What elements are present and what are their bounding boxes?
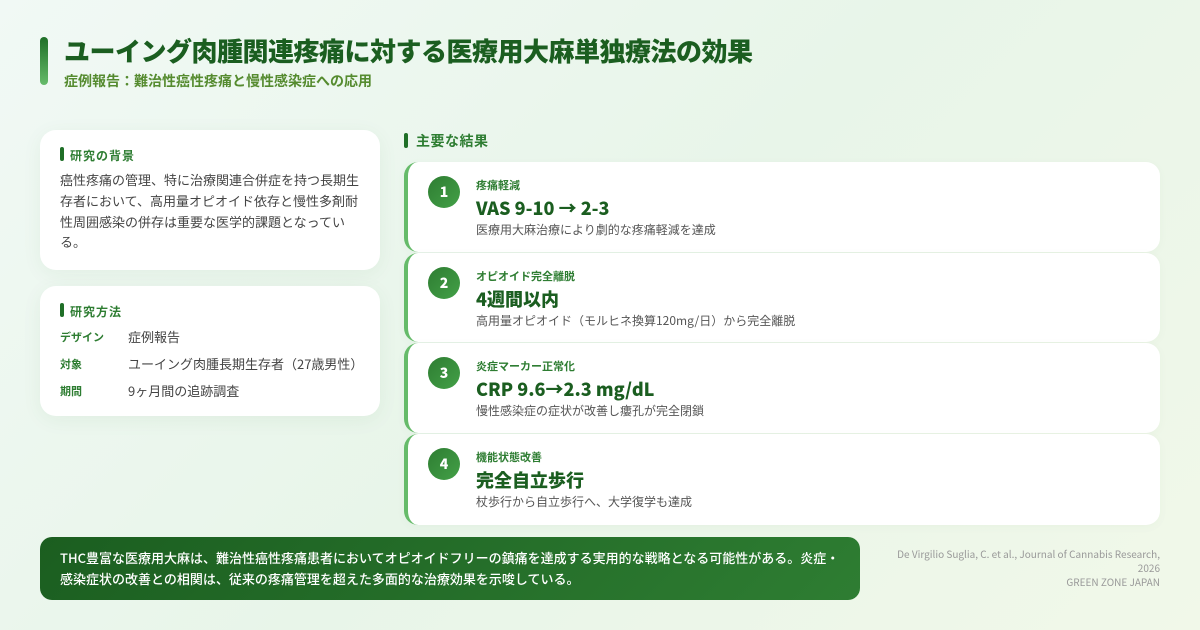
description: 杖歩行から自立歩行へ、大学復学も達成 (476, 493, 692, 510)
result card 4: functional status (404, 434, 1160, 525)
title accent bar (40, 37, 48, 85)
citation and credit: GREEN ZONE JAPAN (1066, 574, 1160, 589)
label: period: 期間 (60, 383, 82, 399)
label: 機能状態改善 (476, 449, 542, 465)
label: design: デザイン (60, 329, 104, 345)
value: 4週間以内 (476, 286, 559, 312)
conclusion banner (40, 537, 860, 600)
number badge 2 (428, 267, 460, 299)
number badge 1: 1 (440, 182, 448, 202)
conclusion banner: THC豊富な医療用大麻は、難治性癌性疼痛患者においてオピオイドフリーの鎮痛を達成する実用的な戦略となる可能性がある。炎症・感染症状の改善との相関は、従来の疼痛管理を超えた多面的な治療効果を示唆している。 (60, 548, 839, 588)
result card 3: inflammation marker (404, 343, 1160, 433)
number badge 2: 2 (440, 273, 448, 293)
label: subject: 対象 (60, 356, 82, 372)
number badge 3: 3 (440, 363, 448, 383)
value: period: 9ヶ月間の追跡調査 (128, 381, 239, 400)
panel: research methods (40, 286, 380, 416)
background text: 癌性疼痛の管理、特に治療関連合併症を持つ長期生存者において、高用量オピオイド依存と慢性多剤耐性周囲感染の併存は重要な医学的課題となっている。 (60, 170, 359, 251)
number badge 4: 4 (440, 454, 448, 474)
heading: research background: 研究の背景 (70, 147, 135, 164)
result card 2: opioid cessation (404, 253, 1160, 342)
value: 完全自立歩行 (476, 467, 584, 493)
description: 医療用大麻治療により劇的な疼痛軽減を達成 (476, 221, 716, 238)
number badge 4 (428, 448, 460, 480)
label: オピオイド完全離脱 (476, 268, 575, 284)
value: subject: ユーイング肉腫長期生存者（27歳男性） (128, 354, 363, 373)
heading: key results: 主要な結果 (416, 131, 488, 151)
number badge 1 (428, 176, 460, 208)
subtitle: 症例報告：難治性癌性疼痛と慢性感染症への応用 (64, 71, 372, 91)
number badge 3 (428, 357, 460, 389)
value: design: 症例報告 (128, 327, 180, 346)
label: 炎症マーカー正常化 (476, 358, 575, 374)
result card 1: pain relief (404, 162, 1160, 252)
heading: research methods: 研究方法 (70, 303, 122, 320)
panel: research background (40, 130, 380, 270)
citation and credit: De Virgilio Suglia, C. et al., Journal of Cannabis Research, 2026 (897, 546, 1160, 575)
value: VAS 9-10 → 2-3 (476, 195, 610, 221)
citation and credit (897, 546, 1160, 589)
title: ユーイング肉腫関連疼痛に対する医療用大麻単独療法の効果 (64, 32, 753, 69)
description: 慢性感染症の症状が改善し瘻孔が完全閉鎖 (476, 402, 704, 419)
label: 疼痛軽減 (476, 177, 520, 193)
value: CRP 9.6→2.3 mg/dL (476, 376, 654, 402)
description: 高用量オピオイド（モルヒネ換算120mg/日）から完全離脱 (476, 312, 795, 329)
